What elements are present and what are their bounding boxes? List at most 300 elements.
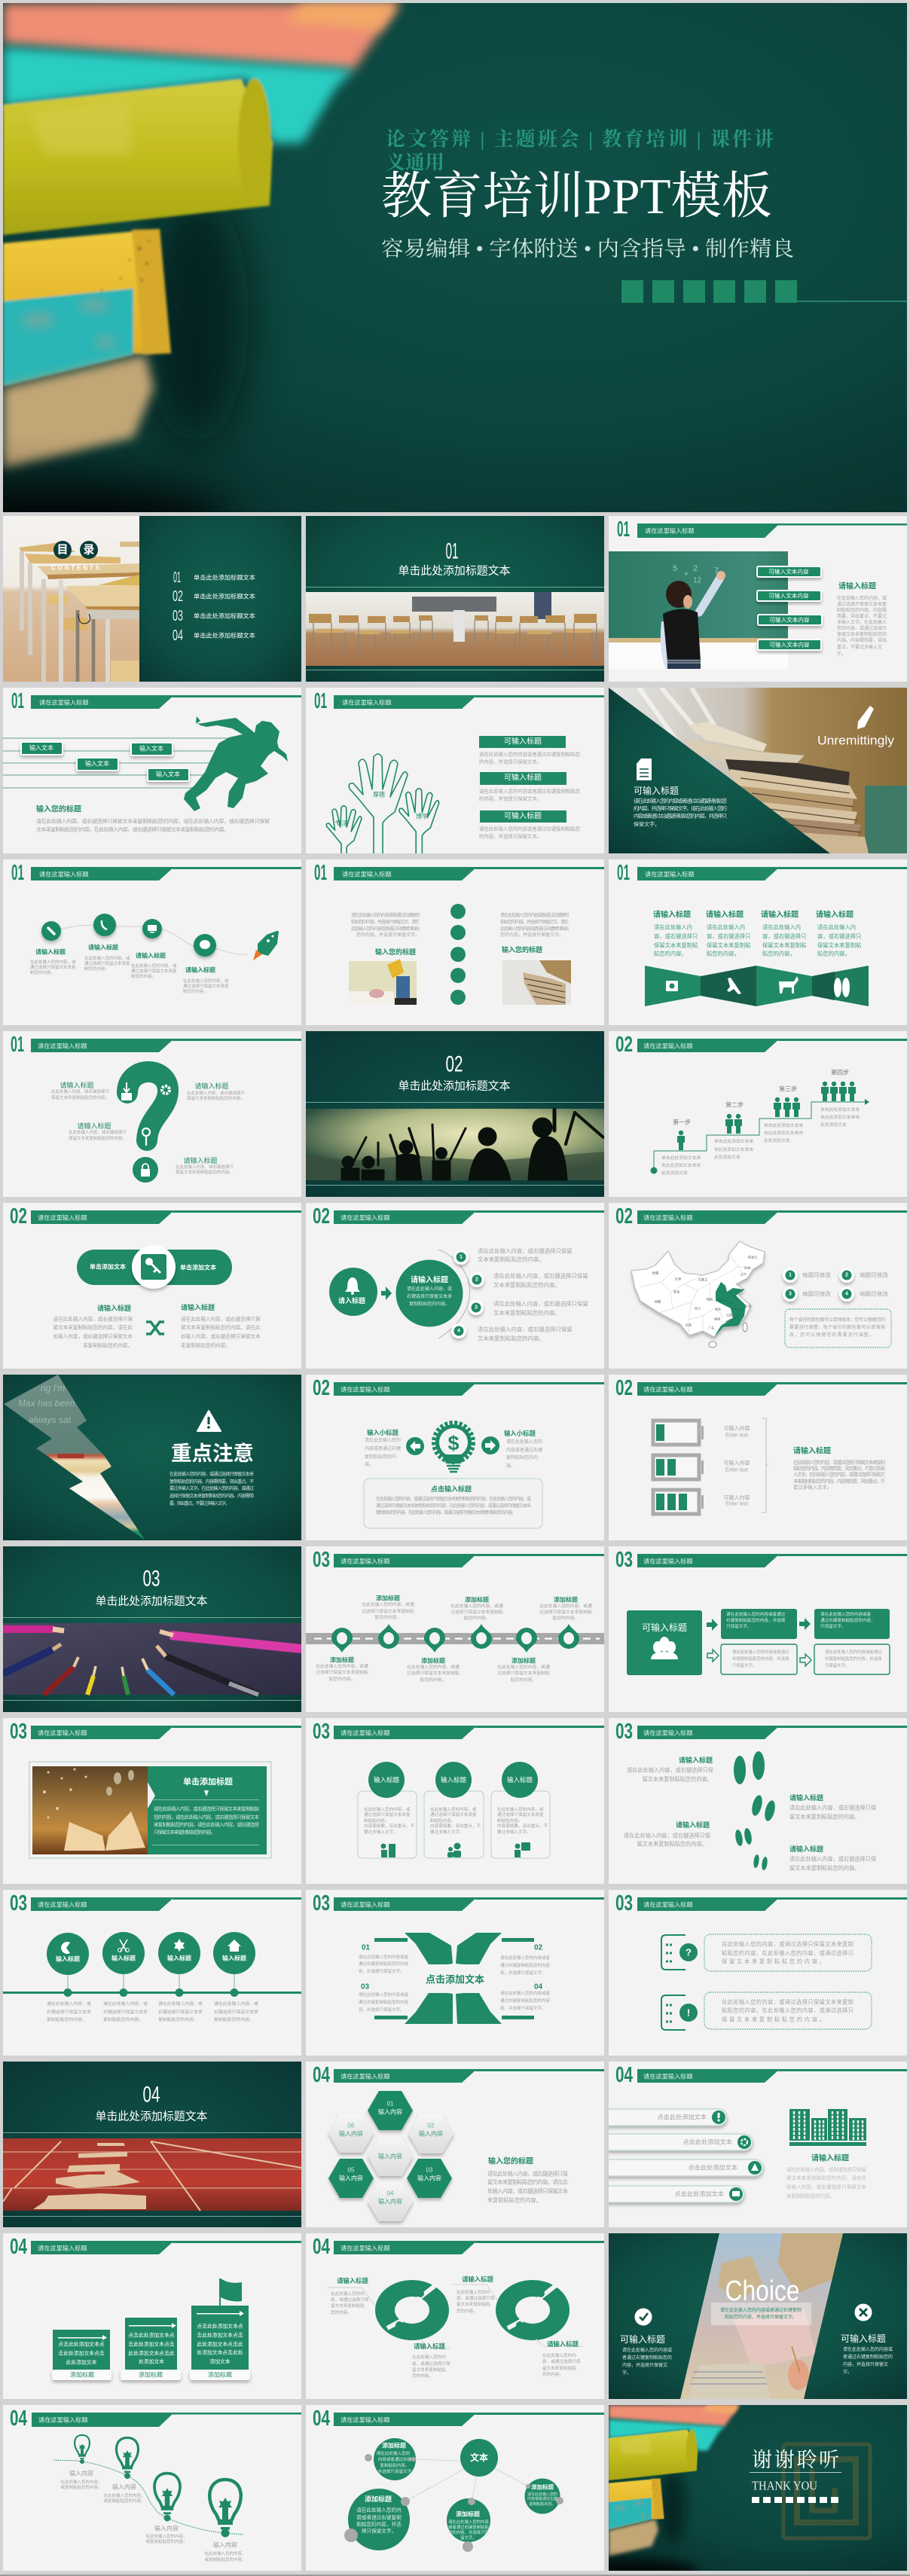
map photo [676,2233,850,2399]
panel: hero cover slide [0,3,907,557]
icon: buildings [789,2109,866,2146]
slide header: 请在这里输入标题 [38,1214,87,1222]
upper labels: 贴您的内容。 [464,1615,490,1621]
battery captions: 可输入内容 [723,1494,750,1500]
slide header [12,693,301,709]
dashed note: 每个省份的颜色都可以单独修改，您可以根据您的 [789,1317,885,1323]
node: right: 内容或者通过右键 [527,2496,557,2501]
slide header: 请在这里输入标题 [39,699,89,707]
step two text: 请在此处输入内容，或右键选择只保 [789,1805,877,1811]
numbered nodes and texts: 文本来复制粘贴您的内容。 [493,1282,560,1288]
question labels: 在此处输入内容，或右键选择只 [187,1090,246,1096]
upper labels [362,1594,592,1621]
slide header [615,1548,907,1572]
flag [219,2278,242,2307]
classroom desks photo [3,516,139,682]
step texts: 击此处添加文本单击 [714,1146,753,1152]
card one: 内容需简要，突出重点，不 [364,1823,415,1829]
card two: 制粘贴内容。 [430,1818,456,1824]
lower labels: 添加标题 [421,1657,445,1665]
source box: 可输入标题 [642,1622,687,1633]
slide header [615,1376,907,1400]
step labels: 第四步 [831,1068,849,1076]
right text: 处输入内容，或右键选择只保留文本 [181,1333,261,1339]
button stack: 可输入文本内容 [768,592,809,600]
timeline labels: 在此处输入您的内容，或 [131,963,177,969]
right option: 者通过右键复制粘贴您的 [843,2354,893,2360]
text block [487,2156,569,2204]
slide header: 请在这里输入标题 [643,2073,693,2080]
right column: 粘贴您的内容，并选择只保留文字。请在 [500,919,569,925]
card two: 在此处输入您的内容，或 [430,1806,477,1812]
text block: 内容或者通过右键复制粘贴您的内容，并选择只 [634,812,727,819]
column texts: 贴您的内容。 [817,951,850,957]
slide header: 01 [11,689,24,713]
bar two: 处添加文本 [139,2358,164,2365]
dashed note: 需要进行调整。每个省份的颜色都可以单独修 [789,1324,885,1330]
step one text: 请输入标题 [679,1756,713,1764]
bar one [52,2330,111,2380]
bar two: 添加标题 [139,2371,163,2379]
card three: 制粘贴内容。 [497,1818,523,1824]
body text: 在此处输入您的内容，或通过选择只保留文本来 [169,1471,254,1477]
question labels: 请输入标题 [77,1122,111,1130]
column texts: 贴您的内容。 [707,951,740,957]
hexagon labels: 05 [348,2166,355,2174]
footprints [734,1751,777,1870]
slide header: 请在这里输入标题 [340,2416,390,2424]
lower labels: 贴您的内容。 [420,1677,446,1683]
hand outlines [326,754,439,853]
flow boxes: 请在此处输入您的内容或者通过 [726,1611,786,1617]
card three: 内容需简要，突出重点，不 [497,1823,548,1829]
column texts: 请在此处输入内 [817,923,856,931]
map: 吉林 [744,1265,751,1270]
map legend: 2 [845,1273,848,1277]
map: 湖南 [714,1317,720,1321]
map: 青海 [673,1290,680,1294]
panel: section 03 divider [3,1546,301,1712]
road [306,1633,604,1644]
slide header: 01 [11,1033,24,1057]
slide header [615,1891,907,1915]
bell circle: 请入标题 [338,1296,365,1305]
column texts: 保留文本来复制粘 [817,942,861,949]
green info panel: 请在此处输入内容，或右键选择只保留文本来复制粘贴 [154,1805,260,1812]
titled text boxes: 请在此处输入您的内容或者通过右键复制粘贴您 [479,826,581,832]
contents list: 01 [173,569,181,586]
slide header [615,1204,907,1228]
outlined note: 复制粘贴您的内容。在此处输入您的内容，或通过选择只保留文本来复制粘贴您的内容。 [376,1509,516,1515]
side texts: 内容或者通过右键 [506,1447,542,1453]
map: 甘肃 [675,1276,681,1282]
slide header: 请在这里输入标题 [39,871,89,878]
contents badges: 目 [56,544,69,556]
text block: 留文本来复制粘贴您的内容。请在此 [487,2178,568,2186]
callouts: 留文本来复制粘贴 [457,2301,490,2307]
dashed note [785,1309,891,1348]
main circle: 复制粘贴您的内容。 [409,1301,450,1307]
panel: dollar bulb slide [306,1375,604,1540]
green info panel: 您的内容。请在此处输入内容，或右键选择只保留文本 [154,1814,260,1820]
button stack: 可输入文本内容 [768,568,809,575]
question labels: 在此处输入内容，或右键选择只 [176,1164,234,1170]
main circle: 请输入标题 [411,1274,448,1285]
section title: 单击此处添加标题文本 [398,565,511,577]
coloured pencils photo [3,1623,301,1695]
captions: 复制粘贴您的内容。 [47,2016,87,2022]
text block [786,2153,867,2199]
captions: 右键选择只保留文本来 [47,2009,91,2015]
card two: 内容需简要，突出重点，不 [430,1823,481,1829]
choice word: Choice [725,2275,800,2307]
panel: footprints slide [609,1718,907,1884]
card three: 要过多输入文字。 [497,1829,531,1835]
note two: 粘贴您的内容。在此处输入您的内容，或通过选择只 [722,2007,854,2014]
upper labels: 贴您的内容。 [553,1615,579,1621]
subtitle tags [386,128,774,173]
bulb three: 或复制粘贴您的内容。 [145,2538,188,2544]
step texts: 此处添加文本 [714,1154,741,1160]
panel: open book card slide [3,1718,301,1884]
titled text boxes: 请在此处输入您的内容或者通过右键复制粘贴您 [479,750,581,758]
text block: 保留文本来复制粘贴您的 [837,631,887,637]
map: 湖北 [715,1306,722,1312]
runner silhouette [184,716,288,811]
source box [627,1610,702,1675]
outlined note: 点击输入标题 [431,1485,472,1493]
slide header: 请在这里输入标题 [340,1901,390,1909]
section title: 单击此处添加标题文本 [95,2111,208,2123]
corner texts: 请在此处输入您的内容或者 [359,1992,409,1998]
bulb four [204,2480,246,2562]
flow boxes: 只保留文字。 [732,1662,756,1668]
text block: 多输入文字。在此处输入 [837,619,887,625]
timeline labels: 通过选择只保留文本来复 [131,968,177,974]
bar one: 添加标题 [70,2371,94,2379]
subtitle tags: 论文答辩 | 主题班会 | 教育培训 | 课件讲 [386,128,774,151]
right column [500,912,571,1005]
bulb two: 输入内容 [112,2483,136,2490]
bulb three: 在此处输入您的内容， [145,2533,188,2539]
column texts: 请输入标题 [653,910,691,919]
contents list [173,569,255,644]
dollar bulb: $ [447,1432,460,1454]
slide header: 请在这里输入标题 [643,1042,693,1050]
numbered nodes and texts: 请在此处输入内容，或右键选择只保留 [478,1326,573,1333]
step three text: 留文本来复制粘贴您的内容。 [637,1841,707,1847]
balloon two [102,1932,145,1974]
raised hands silhouette photo [306,1109,604,1180]
numbered nodes and texts: 请在此处输入内容，或右键选择只保留 [493,1273,588,1279]
map [631,1241,765,1348]
slide header: 请在这里输入标题 [643,1386,693,1393]
panel: question mark slide [3,1031,301,1197]
column texts: 贴您的内容。 [762,951,795,957]
question labels: 请输入标题 [60,1081,94,1089]
body text: 请在此处输入内容，或右键选择只保留文本来复制粘贴您的内容。请在此处输入内容，或右键选择只保留 [36,818,270,824]
right option [841,2303,893,2375]
right text: 留文本来复制粘贴您的内容。请在此 [181,1324,261,1330]
upper labels: 添加标题 [554,1595,578,1603]
captions: 复制粘贴您的内容。 [103,2016,143,2022]
left option: 内容，并选择只保留文 [622,2362,667,2368]
corner texts: 01 [362,1943,371,1952]
slide header: 02 [615,1376,633,1400]
card one: 输入标题 [374,1776,399,1784]
bell circle [329,1268,377,1316]
books photo [609,688,907,853]
column texts: 请在此处输入内 [707,923,745,931]
upper labels: 添加标题 [376,1594,400,1601]
panel: contents slide [3,516,301,682]
side texts: 请在此处输入您的 [506,1439,542,1445]
step two text: 留文本来复制粘贴您的内容。 [789,1814,860,1820]
card two: 要过多输入文字。 [430,1829,464,1835]
body text: 输入您的标题 [36,804,81,813]
step texts: 单击此处添加文本单 [661,1155,701,1161]
battery captions: Enter text [725,1433,748,1439]
bar two: 点击此处添加文本点 [128,2332,175,2338]
panel: flow boxes slide [609,1546,907,1712]
slide header [618,521,907,538]
note two [704,1992,872,2029]
side texts: 容。 [365,1461,374,1467]
column texts: 容，或右键选择只 [762,932,806,940]
captions: 复制粘贴您的内容。 [214,2016,254,2022]
pill list: 点击此处添加文本 [682,2138,732,2145]
column texts: 请输入标题 [761,910,799,919]
note two: 保留文本来复制粘贴您的内容。 [722,2016,825,2023]
vertical dots [450,904,466,1005]
hub circle: 文本 [470,2452,488,2463]
map: 黑龙江 [748,1255,757,1259]
bar two [121,2318,181,2380]
step texts: 此处添加文本 [764,1137,790,1143]
key pill: 单击添加文本 [180,1264,216,1271]
right column: 此处输入您的内容或者通过右键复制粘贴 [500,926,569,932]
callouts: 您的内容。 [331,2309,352,2315]
upper labels: 过选择只保留文本来复制粘 [362,1608,414,1614]
slide header: 请在这里输入标题 [643,1558,693,1565]
lower labels: 添加标题 [330,1656,354,1663]
text block: 请输入标题 [811,2153,849,2163]
hexagon labels: 输入内容 [378,2198,402,2205]
slide header [313,1891,604,1915]
location pins [331,1624,579,1653]
map: 上海 [745,1303,752,1309]
question labels [51,1081,246,1175]
contents badges: 录 [83,544,95,556]
bulb one [60,2435,102,2490]
corner texts: 通过右键复制粘贴您的内容 [500,1962,551,1968]
corner texts [359,1943,551,2013]
lower labels: 在此处输入您的内容，或通 [407,1664,460,1670]
side texts [365,1429,542,1469]
hand labels: 专注 [335,819,347,827]
slide header: 02 [615,1204,633,1228]
text block: 的内容，并选择只保留文字。请在此处输入您的 [634,804,727,812]
icon: document [637,758,652,780]
slide header [313,1376,604,1400]
callouts: 请输入标题 [414,2343,446,2350]
outlined note: 通过选择只保留文本来复制粘贴您的内容。在此处输入您的内容，或通过选择只保留文本来 [376,1503,531,1509]
node: bottom middle: 您的内容，并选择只保 [448,2529,490,2535]
note two: 在此处输入您的内容，或通过选择只保留文本来复制 [722,1999,854,2005]
callouts: 容，或通过选择只保 [542,2358,581,2364]
corner texts: 通过右键复制粘贴您的内容 [359,1999,409,2005]
side texts: 容。 [506,1463,515,1469]
card three: 通过选择只保留文本来复 [497,1811,544,1818]
bulb three [145,2474,188,2544]
map: 西藏 [655,1299,661,1305]
timeline labels: 通过选择只保留文本来复 [30,964,76,970]
text block: 字。 [837,651,846,657]
step labels: 第一步 [673,1118,691,1125]
map: 云南 [686,1323,692,1327]
step four text: 请在此处输入内容，或右键选择只保 [789,1856,877,1862]
right column: 您的内容，并选择只保留文字。 [500,932,563,938]
callouts: 容，或通过选择只保 [457,2295,495,2301]
column texts: 贴您的内容。 [654,951,687,957]
section title: 单击此处添加标题文本 [398,1080,511,1092]
stair line with arrow [651,1099,869,1174]
green info panel: 单击添加标题 [183,1776,233,1787]
left column: 粘贴您的内容，并选择只保留文字。请在 [351,919,420,925]
node: bottom left: 粘贴您的内容，并选 [356,2520,402,2528]
node: bottom left: 添加标题 [365,2495,392,2503]
slide header: 请在这里输入标题 [340,1558,390,1565]
node: bottom left [344,2489,410,2550]
battery captions: 可输入内容 [723,1460,750,1466]
panel: question and exclamation notes [609,1890,907,2056]
slide header [313,1548,604,1572]
label buttons: 输入文本 [139,744,163,752]
callouts: 您的内容。 [457,2308,478,2314]
column texts: 保留文本来复制粘 [654,942,698,949]
decorative squares [621,280,907,303]
main title: 教育培训PPT模板 [381,169,772,224]
slide header: 02 [615,1033,633,1057]
column texts: 容，或右键选择只 [707,932,750,940]
step texts: 单击此处添加文本单 [764,1122,803,1128]
caption word: Unremittingly [817,734,895,747]
bar one: 此处添加文本 [66,2359,97,2365]
button stack: 可输入文本内容 [769,616,810,624]
center label: 点击添加文本 [426,1973,484,1985]
flow boxes: 只保留文字。 [825,1662,849,1668]
node: bottom left: 请在此处输入您的内 [356,2507,402,2513]
map legend: 3 [789,1291,792,1297]
panel: runner slide [3,688,301,853]
step two text: 请输入标题 [789,1793,823,1802]
bar three: 点击此处添加文本点 [197,2323,243,2329]
heading: 重点注意 [171,1442,254,1465]
flow boxes: 请在此处输入您的内容或者通过 [825,1649,882,1655]
thank-you text [750,2449,841,2493]
upper labels: 在此处输入您的内容，或通 [362,1601,414,1607]
panel: choice slide [609,2233,907,2399]
bar one: 点击此处添加文本点 [58,2341,105,2347]
text block: 制粘贴您的内容。内容需 [837,607,887,613]
upper labels: 过选择只保留文本来复制粘 [450,1609,503,1615]
card frame [29,1762,271,1858]
column texts: 保留文本来复制粘 [707,942,750,949]
text block: 来复制粘贴您的内容。 [487,2196,542,2204]
titled text boxes [479,736,581,839]
map: 陕西 [707,1297,713,1302]
pill list: 点击此处添加文本 [674,2190,724,2198]
left column: 输入您的标题 [375,948,416,956]
card two: 通过选择只保留文本来复 [430,1811,477,1818]
node: top left: 请在此处输入您的 [377,2450,411,2456]
timeline bar [3,1988,301,1997]
question labels: 在此处输入内容，或右键选择只 [51,1088,110,1094]
side texts: 复制粘贴您的内 [506,1454,538,1460]
node: top left: 复制粘贴内容。 [380,2462,410,2468]
corner texts: 请在此处输入您的内容或者 [500,1990,551,1996]
lower labels: 过选择只保留文本来复制粘 [407,1670,460,1676]
column texts [653,910,861,957]
label buttons [21,742,189,781]
step labels: 第三步 [779,1085,797,1092]
titled text boxes: 的内容，并选择只保留文字。 [479,833,542,839]
outlined note [364,1479,542,1528]
green info panel: 只保留文本来复制粘贴您的内容。 [154,1829,215,1835]
question mark graphic [121,1072,169,1183]
slide header: 04 [313,2063,330,2087]
right option: 内容，并选择只保留文 [843,2361,888,2367]
bulb three: 输入内容 [154,2525,179,2532]
callouts: 容，或通过选择只保 [331,2297,369,2303]
text block: 简要，突出重点，不要过 [837,613,887,619]
contents list: 03 [173,608,183,624]
dollar bulb [434,1423,473,1472]
numbered nodes and texts [451,1247,588,1342]
left and right arrows [406,1436,499,1455]
column texts: 请在此处输入内 [762,923,801,931]
node: bottom middle: 或者通过右键复制粘贴 [448,2524,490,2530]
lower labels: 过选择只保留文本来复制粘 [316,1669,368,1675]
bar three: 击此处添加文本点击 [197,2332,243,2338]
question labels: 保留文本来复制粘贴您的内容。 [187,1095,245,1101]
balloon three: 输入标题 [167,1954,191,1961]
slide header [617,861,907,885]
icon: arrow [381,1286,392,1300]
text block: 请在此处输入内容，或右键选择只保 [487,2171,569,2177]
panel: key attention slide [3,1375,301,1540]
step three text: 请在此处输入内容，或右键选择只保 [624,1832,711,1839]
callouts: 留文本来复制粘贴 [412,2367,446,2373]
bulb two: 或复制粘贴您的内容。 [103,2498,145,2504]
panel: pills and building slide [594,2062,907,2227]
chalkboard photo with boy: + [684,571,689,578]
slide header [313,2063,604,2087]
callouts: 在此处输入您的内 [412,2354,446,2360]
balloon one: 输入标题 [56,1955,80,1963]
lightning photo: Max has been [18,1398,75,1409]
callouts: 请输入标题 [547,2340,579,2348]
text block: 请输入标题 [838,581,876,591]
lower labels [316,1656,550,1683]
icon: exclamation list: ! [687,2007,690,2019]
panel: China map slide [609,1203,907,1369]
corner texts: 容，并选择只保留文字。 [500,2005,546,2011]
thank-you text: 谢谢聆听 [752,2449,839,2471]
panel: five dots with two images [306,859,604,1025]
puzzle ring one [375,2280,449,2340]
panel: four balloons on line [3,1890,301,2056]
